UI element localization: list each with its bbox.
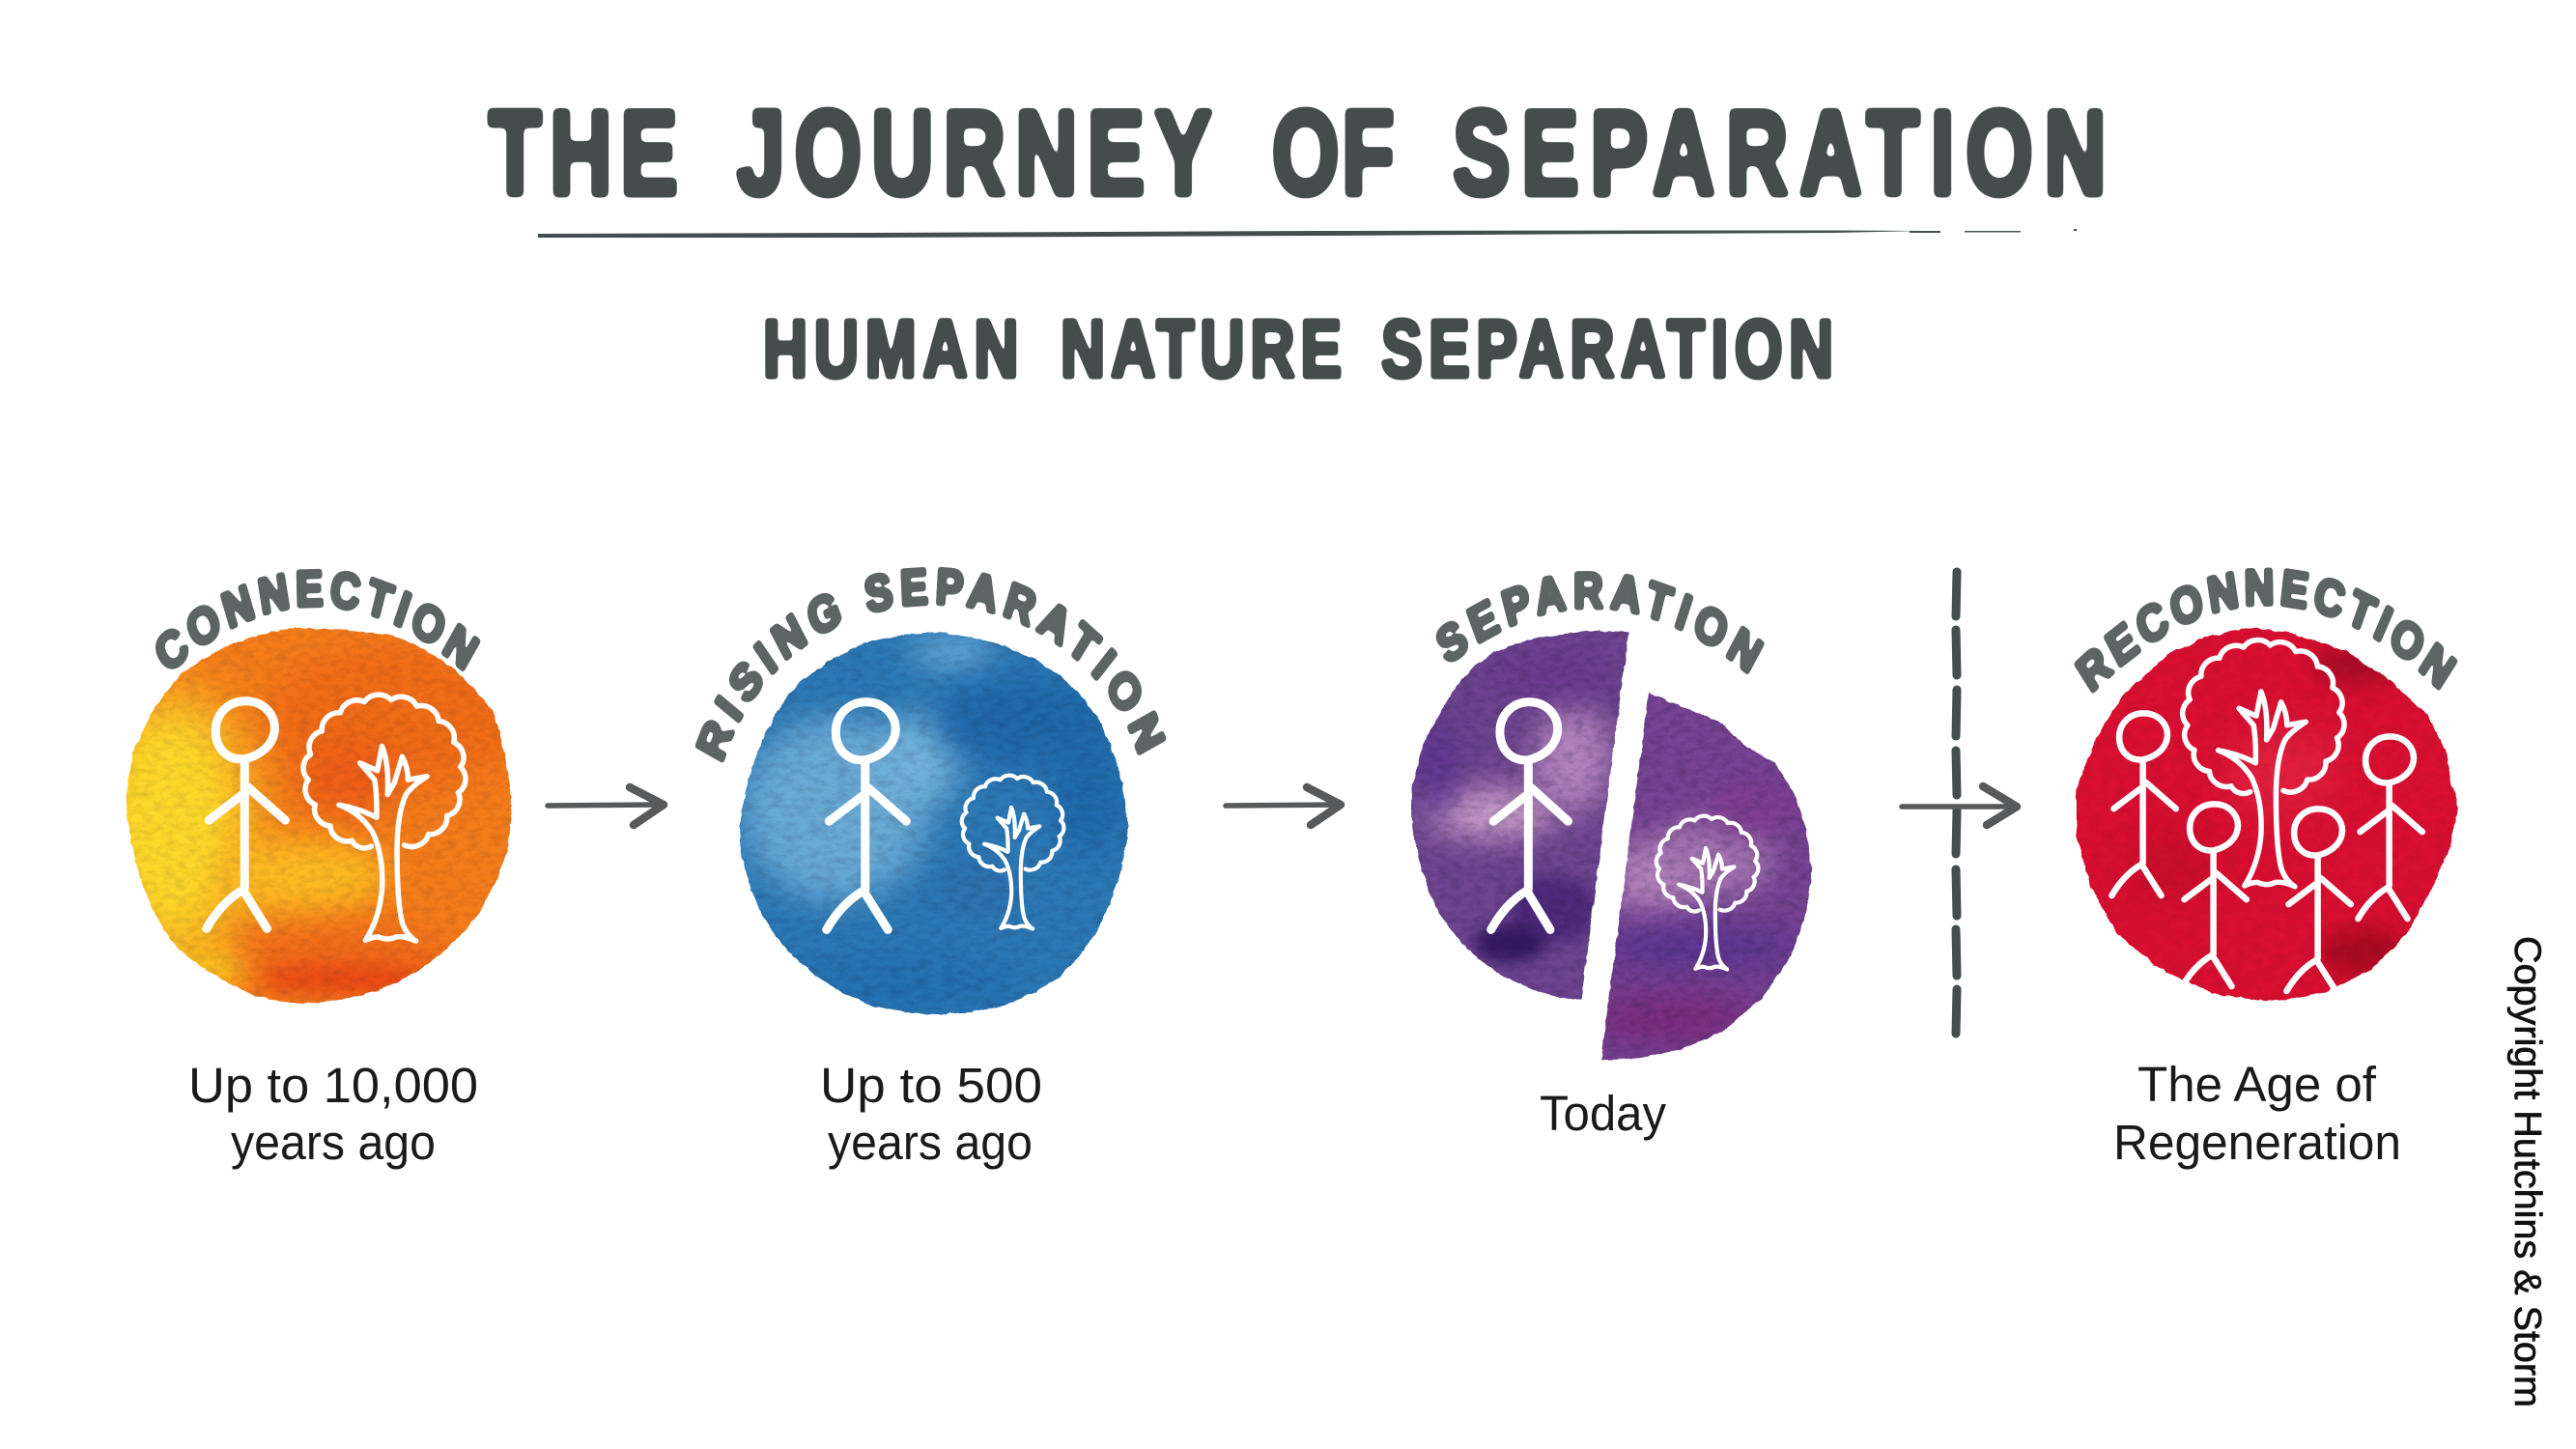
subtitle bbox=[763, 302, 1833, 394]
title underline bbox=[538, 229, 2077, 238]
watercolor half circle: right bbox=[1601, 693, 1812, 1061]
icon: large tree bbox=[2183, 640, 2344, 887]
dashed divider bbox=[1956, 572, 1957, 1034]
caption: Today bbox=[1540, 1086, 1666, 1141]
icon: person 2 bbox=[2182, 804, 2247, 986]
icon: small tree bbox=[962, 776, 1063, 928]
title: THE bbox=[489, 86, 678, 219]
caption: years ago bbox=[231, 1115, 436, 1170]
copyright note: Copyright Hutchins & Storm bbox=[2506, 936, 2548, 1407]
icon: person bbox=[827, 702, 906, 929]
curved label: rising separation: RISING SEPARATION bbox=[695, 566, 1167, 763]
icon: person 4 bbox=[2358, 736, 2422, 919]
curved label: reconnection: RECONNECTION bbox=[2075, 568, 2457, 694]
watercolor circle: red bbox=[2066, 616, 2467, 1010]
watercolor half circle: left bbox=[1410, 630, 1629, 1000]
title bbox=[489, 86, 2107, 219]
watercolor circle: orange bbox=[126, 627, 512, 1005]
arrow 2 bbox=[1226, 787, 1341, 825]
icon: tree bbox=[303, 695, 466, 941]
curved label: connection: CONNECTION bbox=[156, 568, 481, 671]
icon: small tree bbox=[1656, 816, 1758, 969]
panel: connection bbox=[126, 568, 512, 1170]
caption: Up to 10,000 bbox=[188, 1058, 478, 1113]
watercolor circle: blue bbox=[739, 632, 1128, 1015]
caption: The Age of bbox=[2137, 1057, 2377, 1112]
icon: person 3 bbox=[2286, 809, 2351, 991]
caption bbox=[2113, 1057, 2401, 1170]
title: OF bbox=[1272, 86, 1395, 219]
subtitle: SEPARATION bbox=[1381, 302, 1833, 394]
subtitle: NATURE bbox=[1061, 302, 1342, 394]
panel: rising separation bbox=[695, 566, 1167, 1170]
caption: Up to 500 bbox=[820, 1058, 1042, 1113]
title: JOURNEY bbox=[737, 86, 1212, 219]
curved label: separation: SEPARATION bbox=[1435, 571, 1765, 674]
icon: person bbox=[1491, 702, 1568, 929]
arrow 1 bbox=[548, 787, 664, 825]
panel: separation bbox=[1410, 571, 1812, 1141]
arrow 3 bbox=[1902, 786, 2017, 825]
panel: reconnection bbox=[2075, 568, 2459, 1170]
icon: person 1 bbox=[2111, 713, 2176, 895]
caption bbox=[188, 1058, 478, 1170]
caption: Regeneration bbox=[2113, 1115, 2401, 1170]
caption bbox=[820, 1058, 1042, 1170]
caption: years ago bbox=[828, 1115, 1033, 1170]
icon: person bbox=[207, 701, 285, 928]
title: SEPARATION bbox=[1453, 86, 2107, 219]
subtitle: HUMAN bbox=[763, 302, 1018, 394]
